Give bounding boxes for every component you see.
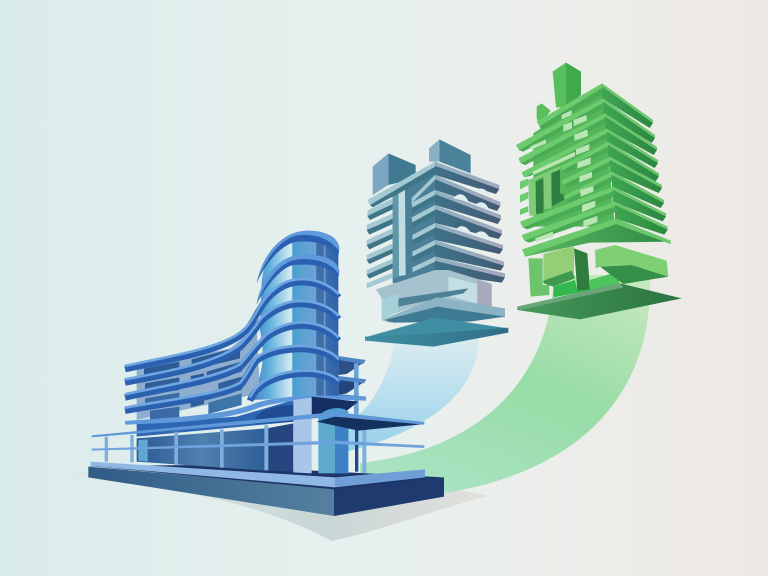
arrow: blue ribbon to grey tower <box>345 335 479 452</box>
wing glass <box>137 327 260 420</box>
building: existing blue building <box>88 231 444 516</box>
arrow: green ribbon to green tower <box>360 275 650 493</box>
floating base plate <box>517 283 682 319</box>
canopy plates <box>92 412 424 451</box>
core <box>533 87 615 227</box>
wing windows <box>144 347 242 421</box>
core frame <box>393 189 406 278</box>
tower crescents <box>257 231 339 304</box>
ground shadow <box>72 468 488 541</box>
big lower slab <box>522 218 671 257</box>
canopy columns <box>105 423 366 473</box>
podium slab <box>125 396 366 437</box>
pale windows <box>530 110 597 242</box>
green left floors <box>516 83 615 243</box>
back floors <box>338 356 366 415</box>
left floors <box>367 162 435 288</box>
core wall <box>393 170 435 283</box>
recessed glass <box>137 405 293 472</box>
recessed openings <box>520 166 570 216</box>
floating base plate <box>365 318 508 347</box>
glass box <box>318 408 348 473</box>
rooftop blocks <box>373 139 471 195</box>
podium frame <box>376 270 505 323</box>
tower and wing floor bands <box>125 279 339 411</box>
green right floors <box>602 83 668 235</box>
window arcs <box>453 189 491 240</box>
building: grey-blue floating tower <box>365 139 508 347</box>
tower glass <box>252 233 338 400</box>
spire <box>537 63 581 125</box>
canopy underside <box>317 417 424 431</box>
right floors <box>435 162 505 283</box>
main column <box>293 398 312 473</box>
building: green floating tower <box>516 63 682 319</box>
lower blocks <box>528 245 668 297</box>
base slab <box>88 462 444 516</box>
